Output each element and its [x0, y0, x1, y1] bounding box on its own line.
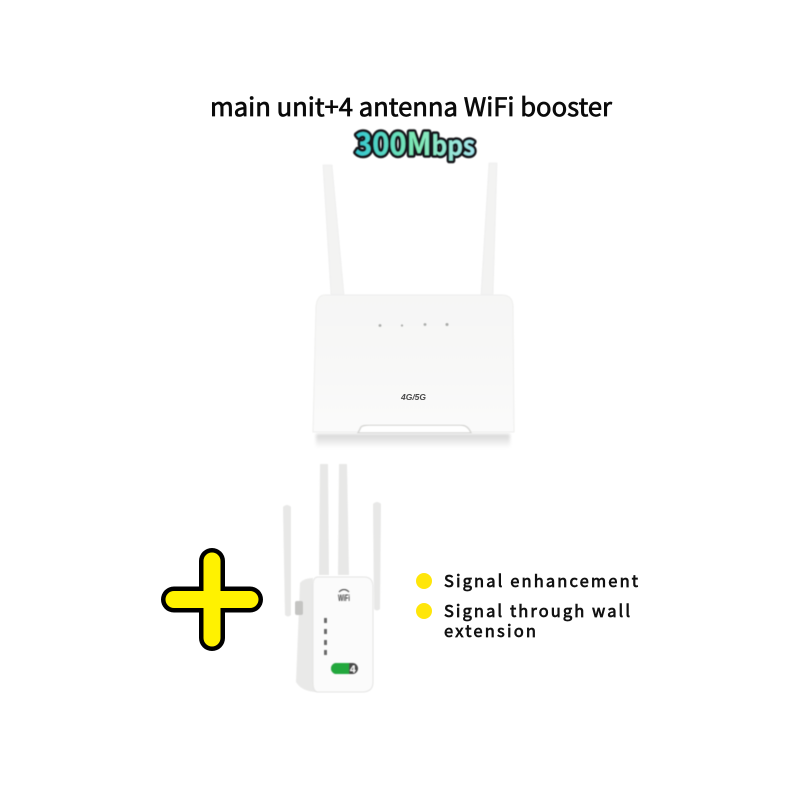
booster inner right antenna — [338, 464, 349, 575]
router shadow — [316, 434, 510, 448]
booster outer left antenna — [283, 505, 291, 616]
title: main unit+4 antenna WiFi booster — [210, 88, 612, 124]
booster side knob — [295, 601, 303, 615]
booster side — [296, 578, 318, 692]
booster inner left antenna — [319, 464, 329, 575]
router stand — [358, 425, 471, 433]
plus sign — [174, 561, 250, 638]
bullet: signal through wall extension: Signal through wall — [444, 598, 630, 622]
booster outer right antenna — [373, 502, 381, 610]
router status lights — [379, 323, 448, 327]
booster indicators — [324, 618, 327, 655]
booster WiFi logo — [338, 590, 350, 603]
booster green badge: 4 — [350, 664, 356, 676]
router: main unit — [313, 163, 514, 448]
booster green badge — [331, 663, 358, 676]
router body — [313, 295, 514, 432]
bullet: signal through wall extension — [416, 598, 630, 642]
router label: 4G/5G — [400, 392, 426, 402]
WiFi booster — [283, 464, 381, 692]
bullet: signal through wall extension: extension — [444, 618, 536, 642]
router left antenna — [323, 165, 344, 295]
booster front face — [313, 577, 373, 692]
speed badge: 300Mbps: 300Mbps — [355, 119, 475, 164]
bullet: signal enhancement: Signal enhancement — [444, 568, 638, 592]
booster WiFi logo: WiFi — [338, 593, 350, 603]
router right antenna — [481, 163, 497, 295]
